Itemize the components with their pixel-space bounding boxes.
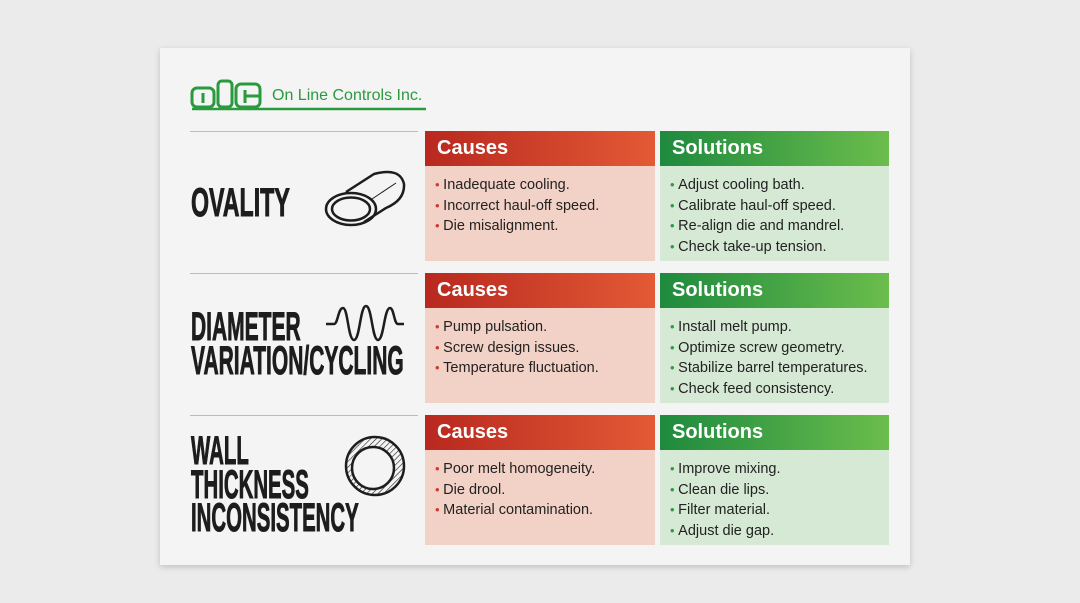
panel: solutions wall: Improve mixing.: [678, 461, 781, 477]
icon: oval tube: [324, 170, 406, 226]
heading: diameter: VARIATION/CYCLING: [191, 338, 404, 382]
panel: causes diameter: Pump pulsation.: [443, 319, 547, 335]
heading: wall thickness: INCONSISTENCY: [191, 496, 359, 540]
logo: [190, 80, 426, 110]
panel: causes wall: [425, 415, 655, 545]
heading: diameter: [190, 305, 404, 382]
panel: causes ovality: Causes: [437, 137, 508, 159]
panel: solutions wall: [660, 415, 889, 545]
panel: solutions ovality: [660, 131, 889, 261]
panel: solutions ovality: Calibrate haul-off speed.: [678, 198, 836, 214]
heading: diameter: DIAMETER: [191, 305, 301, 349]
panel: solutions diameter: Stabilize barrel temperatures.: [678, 360, 868, 376]
panel: causes wall: Poor melt homogeneity.: [443, 461, 595, 477]
icon: wave: [326, 304, 404, 342]
logo text: On Line Controls Inc.: [272, 87, 422, 104]
panel: causes ovality: Incorrect haul-off speed.: [443, 198, 599, 214]
panel: causes diameter: Screw design issues.: [443, 340, 579, 356]
panel: solutions wall: Clean die lips.: [678, 482, 769, 498]
panel: causes ovality: Inadequate cooling.: [443, 177, 570, 193]
card: [160, 48, 910, 565]
panel: solutions wall: Adjust die gap.: [678, 523, 774, 539]
panel: solutions ovality: Adjust cooling bath.: [678, 177, 805, 193]
icon: ring: [344, 436, 406, 496]
heading: wall thickness: [190, 429, 359, 540]
panel: solutions wall: Filter material.: [678, 502, 770, 518]
panel: solutions ovality: Check take-up tension.: [678, 239, 826, 255]
panel: causes wall: Material contamination.: [443, 502, 593, 518]
panel: causes ovality: [425, 131, 655, 261]
heading: ovality: OVALITY: [191, 181, 290, 225]
panel: causes diameter: Temperature fluctuation.: [443, 360, 599, 376]
panel: solutions diameter: Solutions: [672, 279, 763, 301]
panel: solutions wall: Solutions: [672, 421, 763, 443]
panel: solutions diameter: Check feed consistency.: [678, 381, 834, 397]
panel: solutions ovality: Re-align die and mandrel.: [678, 218, 844, 234]
panel: causes diameter: [425, 273, 655, 403]
panel: solutions diameter: Install melt pump.: [678, 319, 792, 335]
panel: causes ovality: Die misalignment.: [443, 218, 558, 234]
panel: causes diameter: Causes: [437, 279, 508, 301]
panel: solutions diameter: Optimize screw geometry.: [678, 340, 845, 356]
heading: wall thickness: WALL: [191, 429, 249, 473]
panel: causes wall: Causes: [437, 421, 508, 443]
heading: wall thickness: THICKNESS: [191, 462, 309, 506]
panel: solutions ovality: Solutions: [672, 137, 763, 159]
panel: solutions diameter: [660, 273, 889, 403]
panel: causes wall: Die drool.: [443, 482, 505, 498]
